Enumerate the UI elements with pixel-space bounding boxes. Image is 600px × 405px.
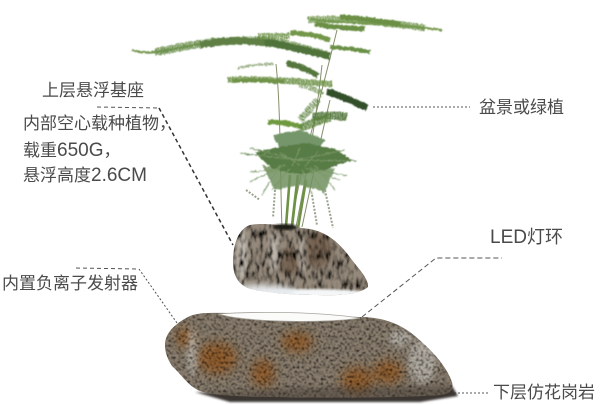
lower rock shadow — [195, 386, 458, 402]
label: upper base: 上层悬浮基座 — [42, 81, 144, 100]
top right frond — [310, 19, 442, 30]
text block: upper base description: 内部空心载种植物， — [23, 114, 176, 133]
plant: asparagus fern — [132, 17, 442, 228]
top left frond — [132, 41, 270, 53]
text block: upper base description: 悬浮高度2.6CM — [23, 165, 147, 186]
text block: upper base description — [23, 114, 176, 186]
label: bonsai or plant: 盆景或绿植 — [479, 98, 564, 117]
side fronds — [290, 33, 330, 40]
fronds — [132, 17, 442, 128]
label: LED ring: LED灯环 — [490, 227, 563, 248]
soil opening — [273, 224, 297, 230]
leader lines — [76, 107, 502, 393]
text block: upper base description: 载重650G， — [23, 140, 120, 161]
label: lower faux granite: 下层仿花岗岩 — [493, 383, 595, 402]
upper levitating rock — [233, 223, 368, 296]
LED ring — [218, 312, 360, 321]
lower granite rock — [165, 312, 452, 398]
label: ion emitter: 内置负离子发射器 — [2, 274, 138, 293]
bushy mid foliage — [240, 130, 357, 195]
hanging sprigs — [246, 190, 333, 228]
stems — [276, 30, 337, 228]
